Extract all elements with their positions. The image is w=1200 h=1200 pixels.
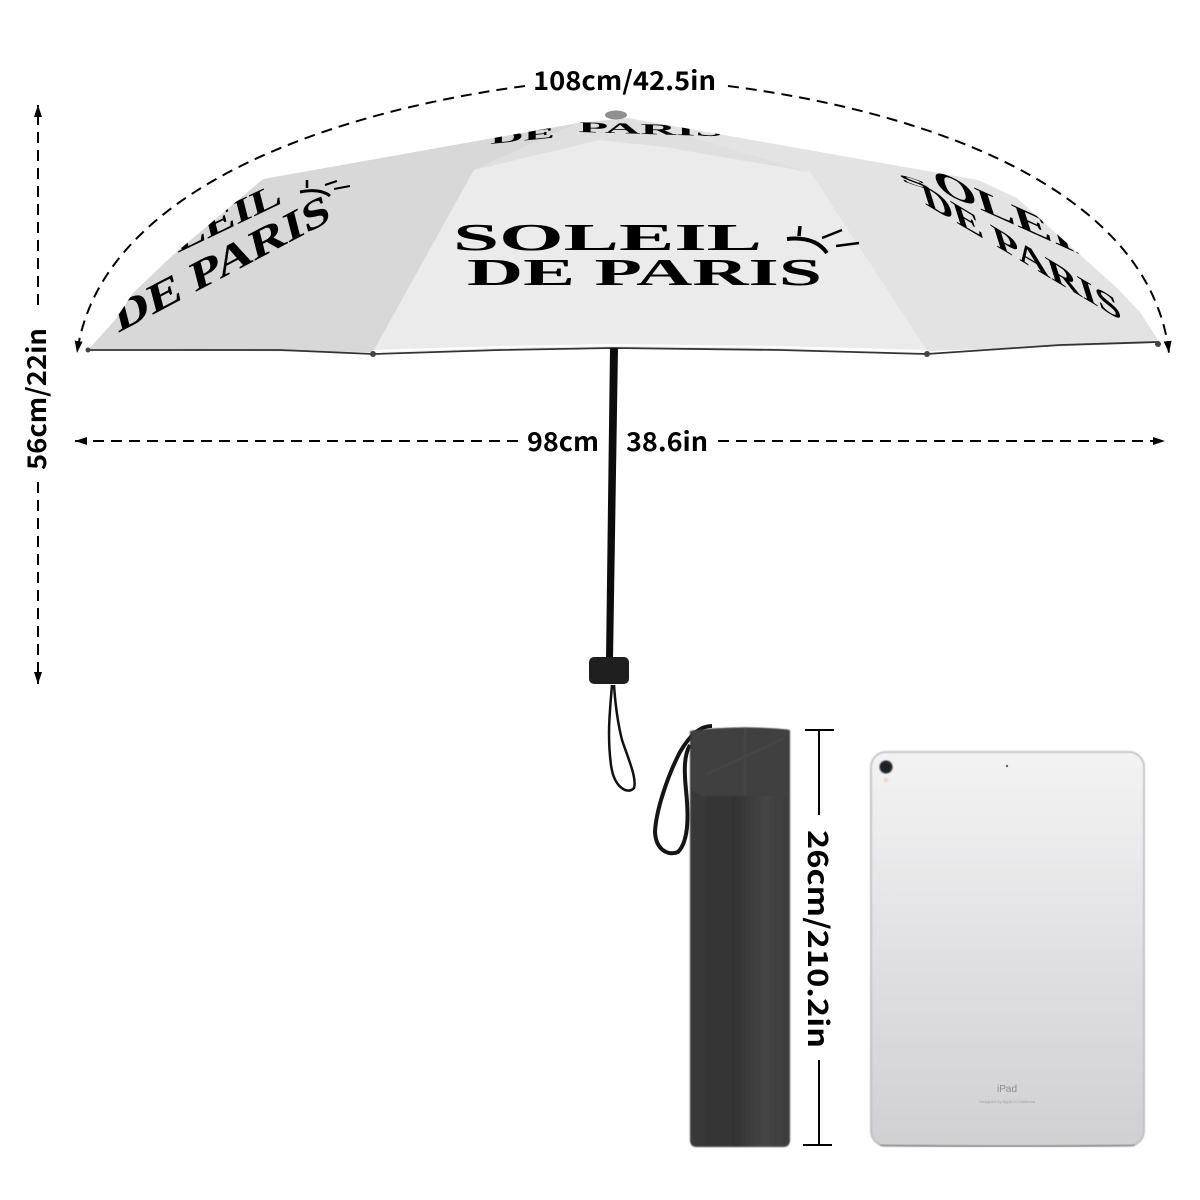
logo text: right S: S — [894, 171, 935, 194]
logo text: right DE PARIS: DE PARIS — [915, 174, 1126, 329]
tablet bottom edge — [880, 1145, 1135, 1146]
logo: centre panel — [453, 217, 859, 294]
arc dashed arrow left — [77, 86, 525, 353]
logo text: top PARIS: PARIS — [578, 119, 723, 140]
arc dashed arrow right — [728, 86, 1169, 353]
canopy left panel — [88, 123, 578, 352]
canopy hem highlight — [373, 345, 927, 351]
umbrella shaft — [606, 348, 618, 660]
logo text: left SOLEIL: SOLEIL — [112, 176, 285, 289]
height label: 56cm/22in — [17, 328, 54, 470]
tablet size comparison — [871, 752, 1144, 1146]
canopy right panel — [628, 118, 1160, 351]
tablet flash — [884, 778, 888, 782]
pouch strap — [655, 726, 712, 853]
folded length label: 26cm/210.2in — [799, 830, 839, 1048]
width dashed arrow left — [75, 440, 518, 442]
logo: left panel — [118, 180, 350, 333]
rib tips — [86, 341, 1161, 357]
canopy hem — [88, 342, 1158, 354]
logo sun icon left — [300, 180, 350, 196]
folded umbrella pouch — [655, 726, 790, 1147]
arc label: 108cm/42.5in — [533, 61, 716, 98]
dimension: folded length — [799, 730, 839, 1145]
tablet fine print: Designed by Apple in California — [979, 1099, 1036, 1104]
pouch top flap — [692, 728, 788, 796]
dimension: straight width — [75, 422, 1165, 459]
pouch body — [690, 728, 790, 1147]
wrist strap — [609, 685, 635, 791]
tablet body — [871, 752, 1144, 1146]
logo text: top DE: DE — [490, 125, 555, 148]
canopy centre panel — [373, 118, 927, 352]
logo text: SOLEIL: SOLEIL — [453, 217, 762, 259]
tablet microphone — [1006, 765, 1008, 767]
folded length top bracket — [805, 730, 834, 815]
tablet logo: iPad — [997, 1084, 1017, 1095]
umbrella canopy — [86, 110, 1161, 357]
tablet camera — [880, 760, 892, 774]
folded length bottom bracket — [803, 1060, 832, 1145]
logo: clipped top panel — [490, 122, 720, 144]
pouch fold — [705, 728, 785, 795]
dimension: arc width — [77, 61, 1169, 353]
logo text: left DE PARIS: DE PARIS — [109, 184, 334, 342]
logo sun icon — [787, 226, 859, 253]
logo: right panel — [900, 174, 1120, 318]
width label 98cm: 98cm — [527, 422, 599, 459]
height dashed arrow down — [37, 482, 39, 684]
canopy tip — [605, 110, 627, 120]
canopy top shading — [474, 118, 810, 172]
handle knob — [589, 657, 629, 684]
logo text: right OLEIL: OLEIL — [927, 160, 1115, 277]
width label 38.6in: 38.6in — [626, 422, 708, 459]
height dashed arrow up — [37, 105, 39, 305]
logo text: DE PARIS: DE PARIS — [467, 252, 822, 294]
width dashed arrow right — [718, 440, 1165, 442]
